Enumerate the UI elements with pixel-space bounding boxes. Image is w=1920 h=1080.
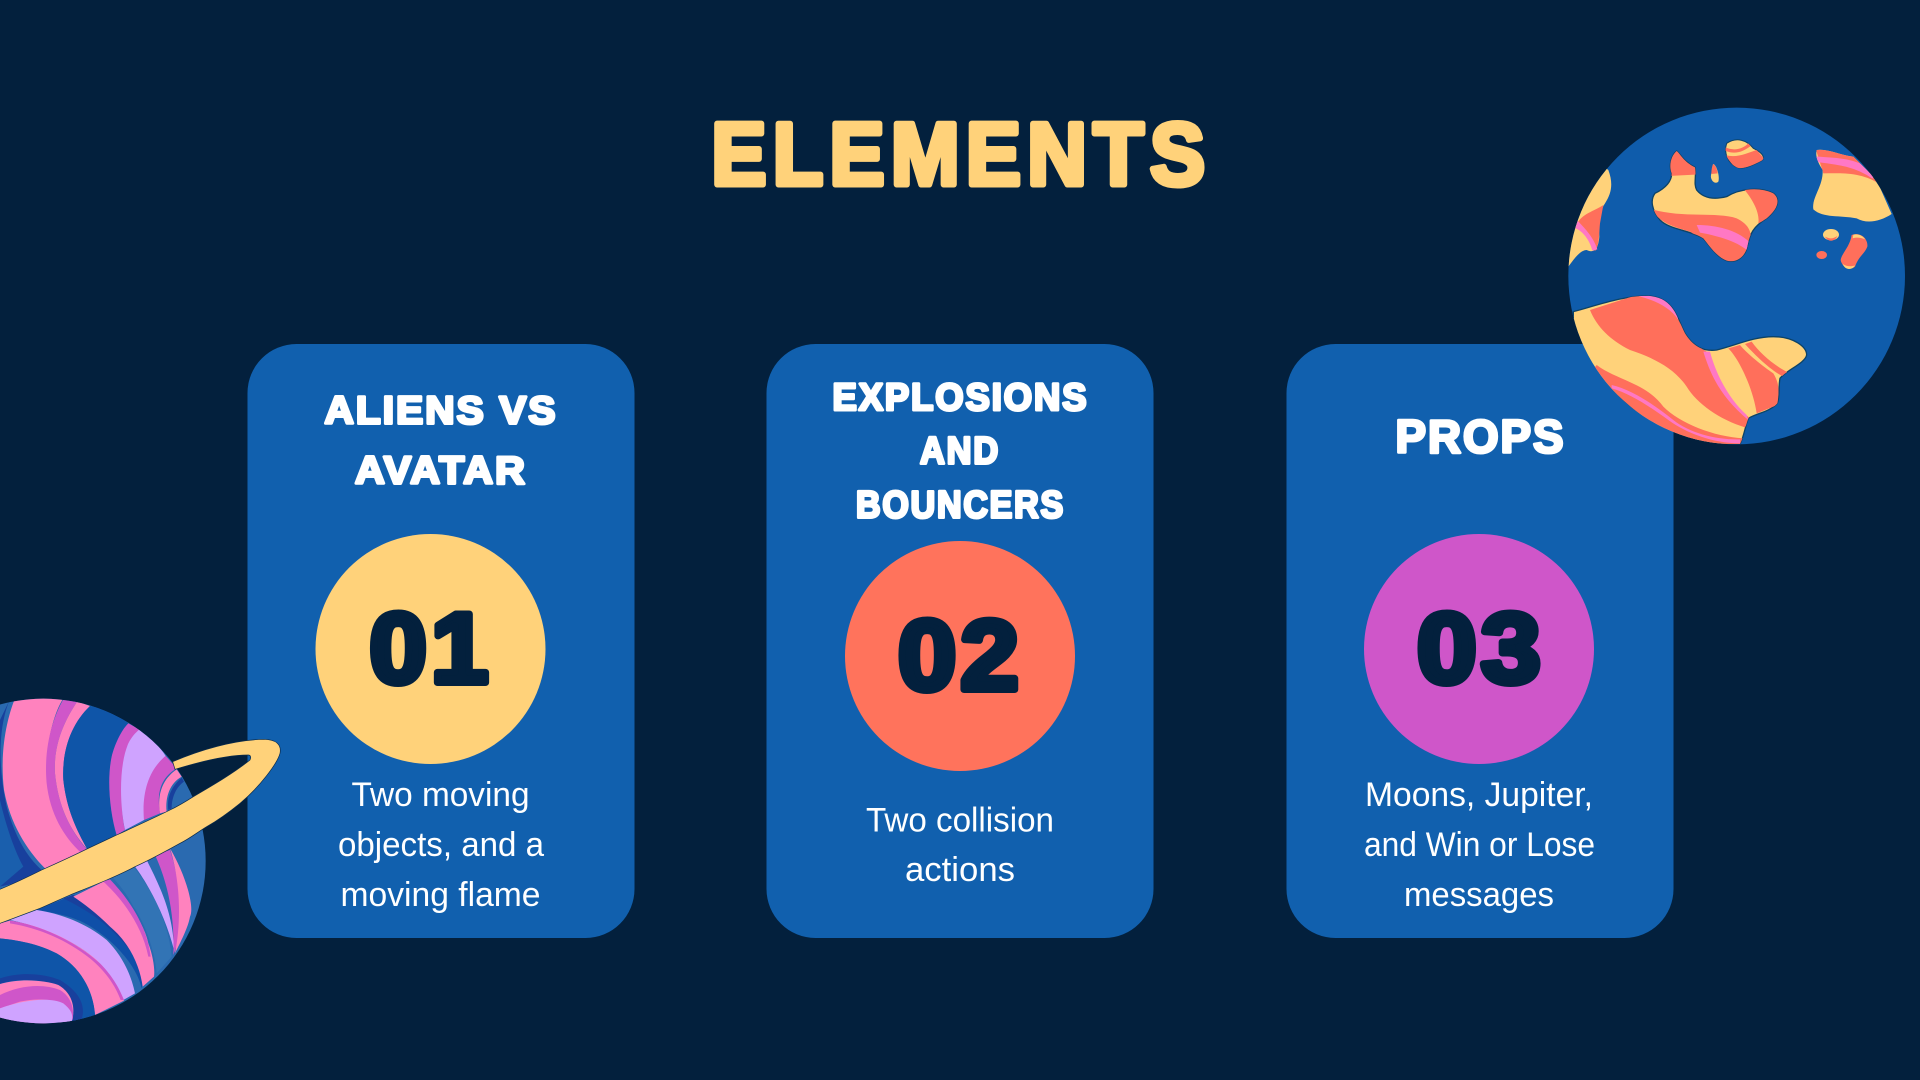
- icon: ringed planet: [0, 698, 280, 1027]
- card 1 background: [248, 344, 634, 938]
- card 2 heading: BOUNCERS: [856, 484, 1065, 526]
- panel: card 1 aliens vs avatar: [248, 344, 634, 938]
- card 3 number badge: 03: [1417, 592, 1545, 704]
- card 2 number badge: 02: [898, 600, 1023, 710]
- panel: card 2 explosions and bouncers: [766, 344, 1154, 938]
- card 3 description: messages: [1404, 876, 1554, 914]
- card 1 heading: [324, 390, 558, 492]
- card 1 description: objects, and a: [338, 826, 544, 864]
- card 1 description: [338, 776, 544, 914]
- card 2 heading: [832, 377, 1088, 526]
- card 2 description: Two collision: [866, 802, 1054, 840]
- card 1 heading: AVATAR: [355, 450, 527, 492]
- card 1 heading: ALIENS VS: [324, 390, 558, 432]
- panel: card 3 props: [1286, 344, 1674, 938]
- title: ELEMENTS: [712, 104, 1212, 204]
- card 1 number badge: [316, 534, 546, 764]
- card 3 description: and Win or Lose: [1364, 826, 1595, 864]
- icon: earth-like planet: [1560, 108, 1905, 450]
- card 3 number badge: [1364, 534, 1594, 764]
- card 3 background: [1286, 344, 1674, 938]
- card 2 description: actions: [905, 851, 1015, 889]
- card 3 heading: PROPS: [1396, 410, 1566, 462]
- card 2 heading: EXPLOSIONS: [832, 377, 1088, 419]
- card 3 description: Moons, Jupiter,: [1365, 776, 1593, 814]
- card 2 heading: AND: [920, 430, 1000, 472]
- card 2 description: [866, 802, 1054, 889]
- card 2 background: [766, 344, 1154, 938]
- card 3 description: [1364, 776, 1595, 914]
- card 1 description: Two moving: [352, 776, 530, 814]
- card 2 number badge: [845, 541, 1075, 771]
- card 1 description: moving flame: [340, 876, 540, 914]
- card 1 number badge: 01: [370, 592, 492, 704]
